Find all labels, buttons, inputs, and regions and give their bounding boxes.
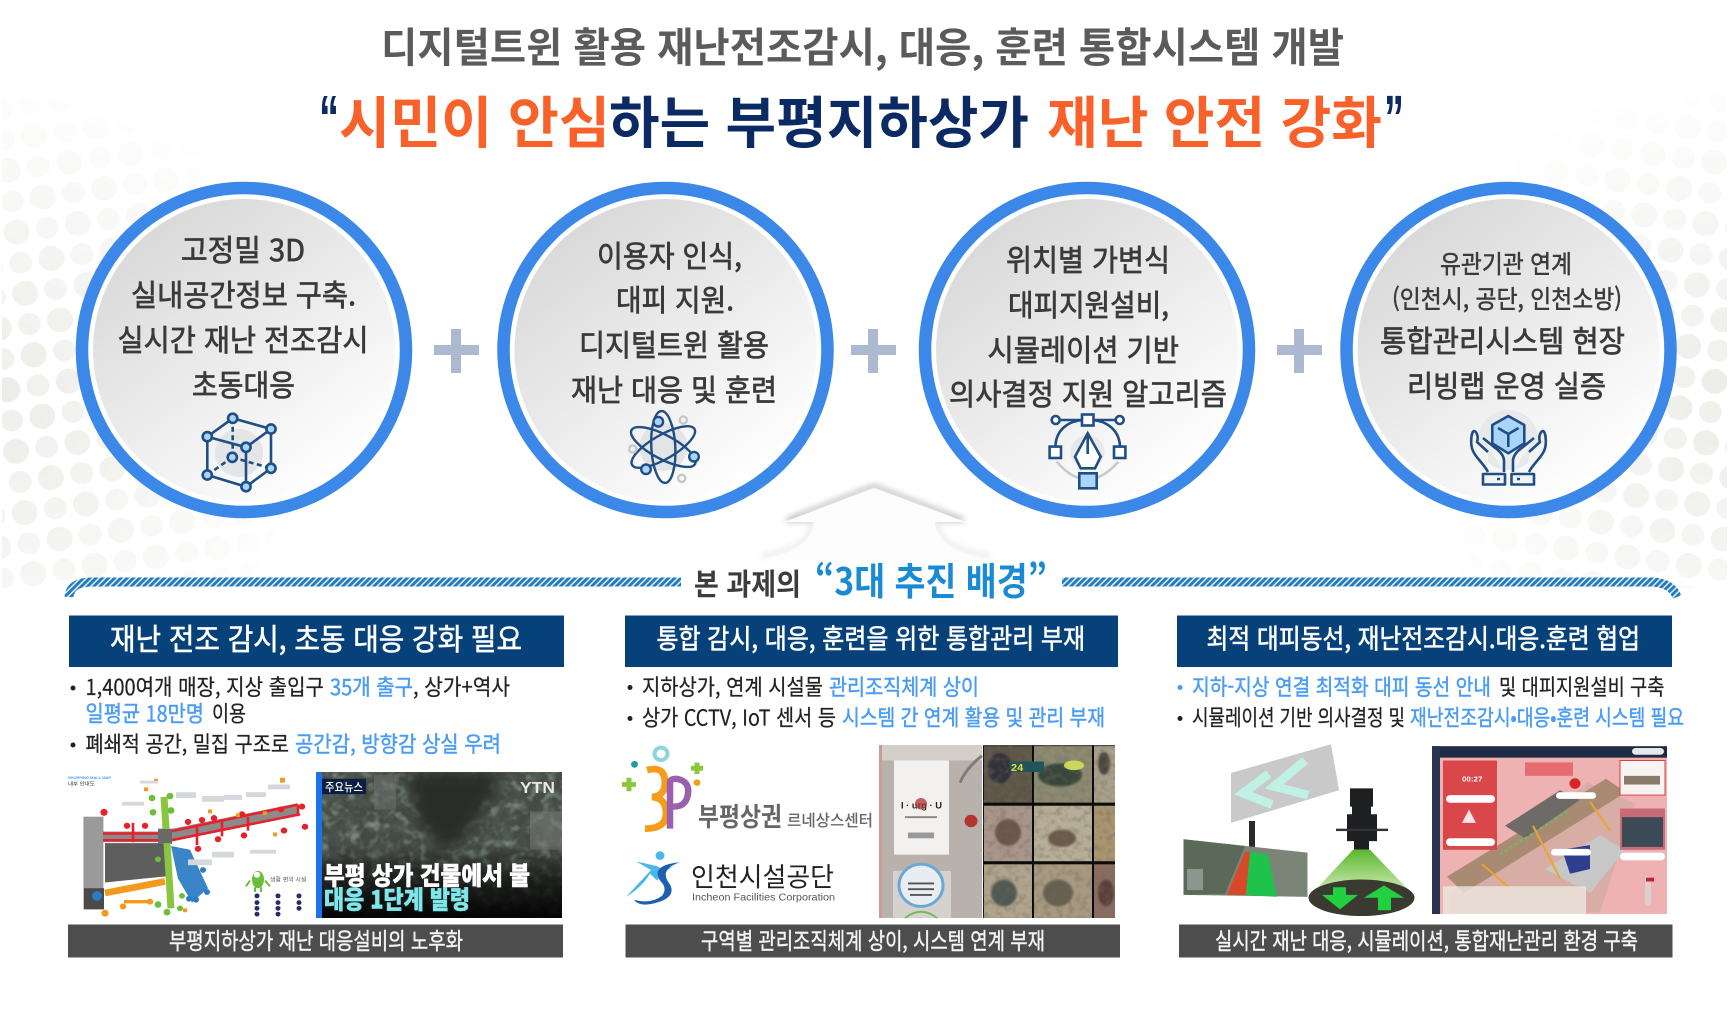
text: circle 2 copy: 재난 대응 및 훈련 bbox=[571, 366, 777, 410]
title: main slogan: 재난 안전 강화 bbox=[1047, 79, 1382, 160]
header: column 1: 재난 전조 감시, 초동 대응 강화 필요 bbox=[110, 615, 522, 659]
text: column 1 bullets: 1,400여개 매장, 지상 출입구 bbox=[86, 670, 324, 702]
text: circle 1 copy: 고정밀 3D bbox=[181, 226, 305, 270]
text: circle 3 copy: 대피지원설비, bbox=[1008, 281, 1169, 325]
heading: 3대 추진 배경: 본 과제의 bbox=[694, 560, 801, 604]
image: shopping mall map: 생활 편의 시설 bbox=[270, 875, 306, 883]
caption: column 3: 실시간 재난 대응, 시뮬레이션, 통합재난관리 환경 구축 bbox=[1215, 922, 1638, 956]
image: YTN news fire capture: 대응 1단계 발령 bbox=[324, 880, 470, 916]
title: main slogan: 시민이 안심 bbox=[339, 79, 610, 160]
mascot bbox=[246, 871, 270, 892]
smoke plume bbox=[405, 772, 500, 850]
caption: column 2: 구역별 관리조직체계 상이, 시스템 연계 부재 bbox=[701, 922, 1045, 956]
text: column 3 bullets: 지하-지상 연결 최적화 대피 동선 안내 bbox=[1192, 670, 1491, 702]
image: CCTV grid bbox=[983, 745, 1115, 918]
image: integrated dashboard screenshot: 00:27 bbox=[1462, 775, 1483, 784]
panel: circle 4 bbox=[1346, 188, 1670, 512]
background: right halftone dots bbox=[1544, 182, 1727, 588]
text: circle 2 copy bbox=[571, 232, 777, 410]
text: circle 4 copy: 통합관리시스템 현장 bbox=[1380, 317, 1625, 361]
image: control device photo: I · urg · U bbox=[901, 801, 942, 811]
text: column 2 bullets: 상가 CCTV, IoT 센서 등 bbox=[642, 700, 836, 732]
image: shopping mall map: 내부 안내도 bbox=[68, 780, 95, 787]
image: guidance sign and projector bbox=[1184, 744, 1416, 916]
text: circle 4 copy: 유관기관 연계 bbox=[1440, 245, 1572, 281]
text: column 1 bullets: 공간감, 방향감 상실 우려 bbox=[295, 727, 501, 759]
decoration: hatched band right bbox=[1062, 582, 1677, 597]
decoration: hatched band left bbox=[69, 582, 681, 597]
image: YTN news fire capture bbox=[316, 772, 562, 918]
text: column 2 bullets: 관리조직체계 상이 bbox=[829, 670, 979, 702]
logo: Bupyeong commercial district renaissance center: 부평상권 bbox=[698, 795, 782, 834]
caption: column 1 bbox=[68, 922, 563, 958]
icon: pen tool bbox=[1050, 414, 1125, 488]
heading: 3대 추진 배경 bbox=[694, 551, 1047, 606]
text: column 3 bullets: 및 대피지원설비 구축 bbox=[1499, 670, 1664, 702]
text: circle 2 copy: 대피 지원. bbox=[616, 276, 734, 320]
image: shopping mall map bbox=[67, 772, 315, 918]
icon: plus 1 bbox=[434, 329, 479, 373]
logo: Incheon Facilities Corporation: 인천시설공단 bbox=[691, 855, 834, 894]
image: YTN news fire capture: YTN bbox=[520, 780, 555, 797]
title: subtitle line: 디지털트윈 활용 재난전조감시, 대응, 훈련 통합시스템 개발 bbox=[381, 14, 1344, 74]
title: main slogan: “ bbox=[319, 82, 339, 154]
icon: atom bbox=[626, 410, 701, 484]
text: circle 3 copy: 시뮬레이션 기반 bbox=[988, 326, 1179, 370]
logo: Incheon Facilities Corporation bbox=[626, 851, 835, 905]
image: YTN news fire capture: 주요뉴스 bbox=[325, 779, 363, 795]
title: main slogan: 하는 부평지하상가 bbox=[609, 79, 1029, 160]
text: column 1 bullets: 이용 bbox=[212, 696, 246, 728]
text: column 1 bullets: 일평균 18만명 bbox=[86, 696, 204, 728]
logo: Bupyeong commercial district renaissance center: 르네상스센터 bbox=[787, 807, 873, 831]
panel: column 3 evacuation bbox=[1177, 616, 1684, 958]
text: column 2 bullets bbox=[628, 670, 1105, 732]
background: left halftone dots bbox=[2, 179, 191, 588]
text: column 1 bullets: 35개 출구 bbox=[330, 670, 413, 702]
text: circle 4 copy: 리빙랩 운영 실증 bbox=[1407, 362, 1606, 406]
text: circle 1 copy: 실시간 재난 전조감시 bbox=[118, 316, 368, 360]
floor plan diagonal bbox=[1475, 782, 1635, 912]
icon: 3D cube bbox=[203, 414, 276, 491]
icon: hands holding box bbox=[1471, 410, 1546, 484]
image: integrated dashboard screenshot bbox=[1432, 746, 1667, 914]
logo: Incheon Facilities Corporation: Incheon Facilities Corporation bbox=[692, 892, 835, 904]
arrow: white chevron up bbox=[760, 486, 990, 560]
header: column 2: 통합 감시, 대응, 훈련을 위한 통합관리 부재 bbox=[656, 618, 1085, 656]
map number markers bbox=[100, 804, 308, 852]
text: column 2 bullets: 지하상가, 연계 시설물 bbox=[642, 670, 823, 702]
icon: plus 3 bbox=[1277, 329, 1322, 373]
text: circle 1 copy: 초동대응 bbox=[192, 361, 295, 405]
text: circle 4 copy bbox=[1380, 245, 1625, 406]
caption: column 1: 부평지하상가 재난 대응설비의 노후화 bbox=[169, 922, 463, 956]
text: circle 3 copy: 의사결정 지원 알고리즘 bbox=[949, 370, 1227, 414]
title: main slogan: ” bbox=[1384, 82, 1404, 154]
text: circle 4 copy: (인천시, 공단, 인천소방) bbox=[1392, 280, 1622, 316]
projector body bbox=[1347, 788, 1377, 850]
text: column 1 bullets bbox=[70, 670, 510, 759]
text: circle 3 copy: 위치별 가변식 bbox=[1006, 236, 1170, 280]
text: column 3 bullets: 시뮬레이션 기반 의사결정 및 bbox=[1192, 700, 1405, 732]
text: circle 3 copy bbox=[949, 236, 1227, 414]
header: column 2 bbox=[625, 616, 1118, 667]
text: circle 2 copy: 이용자 인식, bbox=[597, 232, 742, 276]
image: control device photo bbox=[879, 745, 982, 918]
panel: circle 2 bbox=[504, 188, 828, 512]
panel: column 2 integrated management bbox=[622, 616, 1120, 958]
title: main slogan bbox=[319, 79, 1404, 160]
image: shopping mall map: SHOPPING MALL MAP bbox=[68, 775, 112, 780]
text: circle 1 copy: 실내공간정보 구축. bbox=[131, 271, 356, 315]
image: YTN news fire capture: 부평 상가 건물에서 불 bbox=[324, 856, 530, 892]
logo: Bupyeong commercial district renaissance center bbox=[622, 748, 873, 834]
image: CCTV grid: 24 bbox=[1011, 762, 1023, 774]
LED floor screen bbox=[1184, 839, 1308, 897]
panel: column 1 disaster monitoring bbox=[67, 615, 564, 958]
text: column 1 bullets: , 상가+역사 bbox=[413, 670, 510, 702]
text: column 2 bullets: 시스템 간 연계 활용 및 관리 부재 bbox=[842, 700, 1105, 732]
text: circle 1 copy bbox=[118, 226, 368, 405]
icon: plus 2 bbox=[851, 329, 896, 373]
heading: 3대 추진 배경: “3대 추진 배경” bbox=[815, 551, 1047, 606]
header: column 3 bbox=[1177, 616, 1672, 667]
header: column 3: 최적 대피동선, 재난전조감시.대응.훈련 협업 bbox=[1206, 618, 1640, 656]
text: column 3 bullets bbox=[1178, 670, 1684, 732]
text: column 1 bullets: 폐쇄적 공간, 밀집 구조로 bbox=[86, 727, 289, 759]
panel: circle 1 bbox=[82, 188, 406, 512]
panel: circle 3 bbox=[925, 188, 1249, 512]
text: circle 2 copy: 디지털트윈 활용 bbox=[579, 321, 769, 365]
